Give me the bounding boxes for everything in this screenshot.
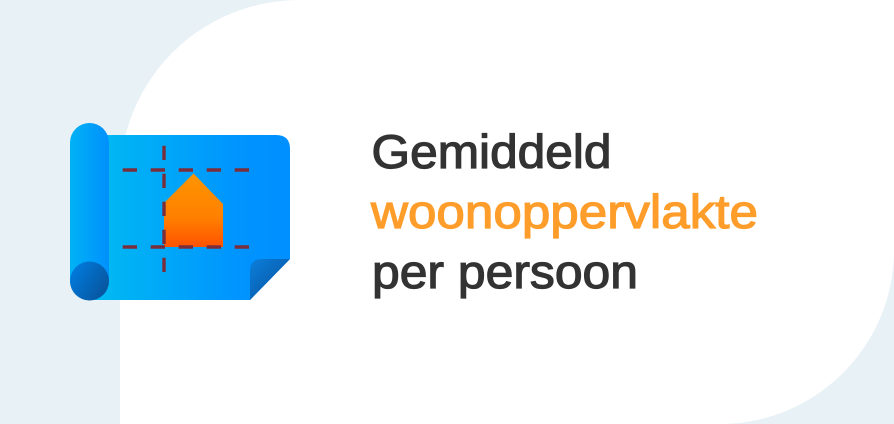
page fold: [250, 259, 290, 300]
icon: house: [164, 174, 223, 247]
title line: woonoppervlakte: woonoppervlakte: [370, 185, 758, 238]
title line: Gemiddeld: Gemiddeld: [372, 125, 612, 178]
title: [370, 125, 758, 298]
dashed construction lines: [123, 146, 250, 273]
title line: per persoon: per persoon: [372, 245, 638, 298]
blueprint sheet: [89, 135, 290, 300]
paper roll: [70, 123, 109, 300]
icon: blueprint roll: [70, 123, 290, 300]
roll end: [70, 262, 109, 300]
